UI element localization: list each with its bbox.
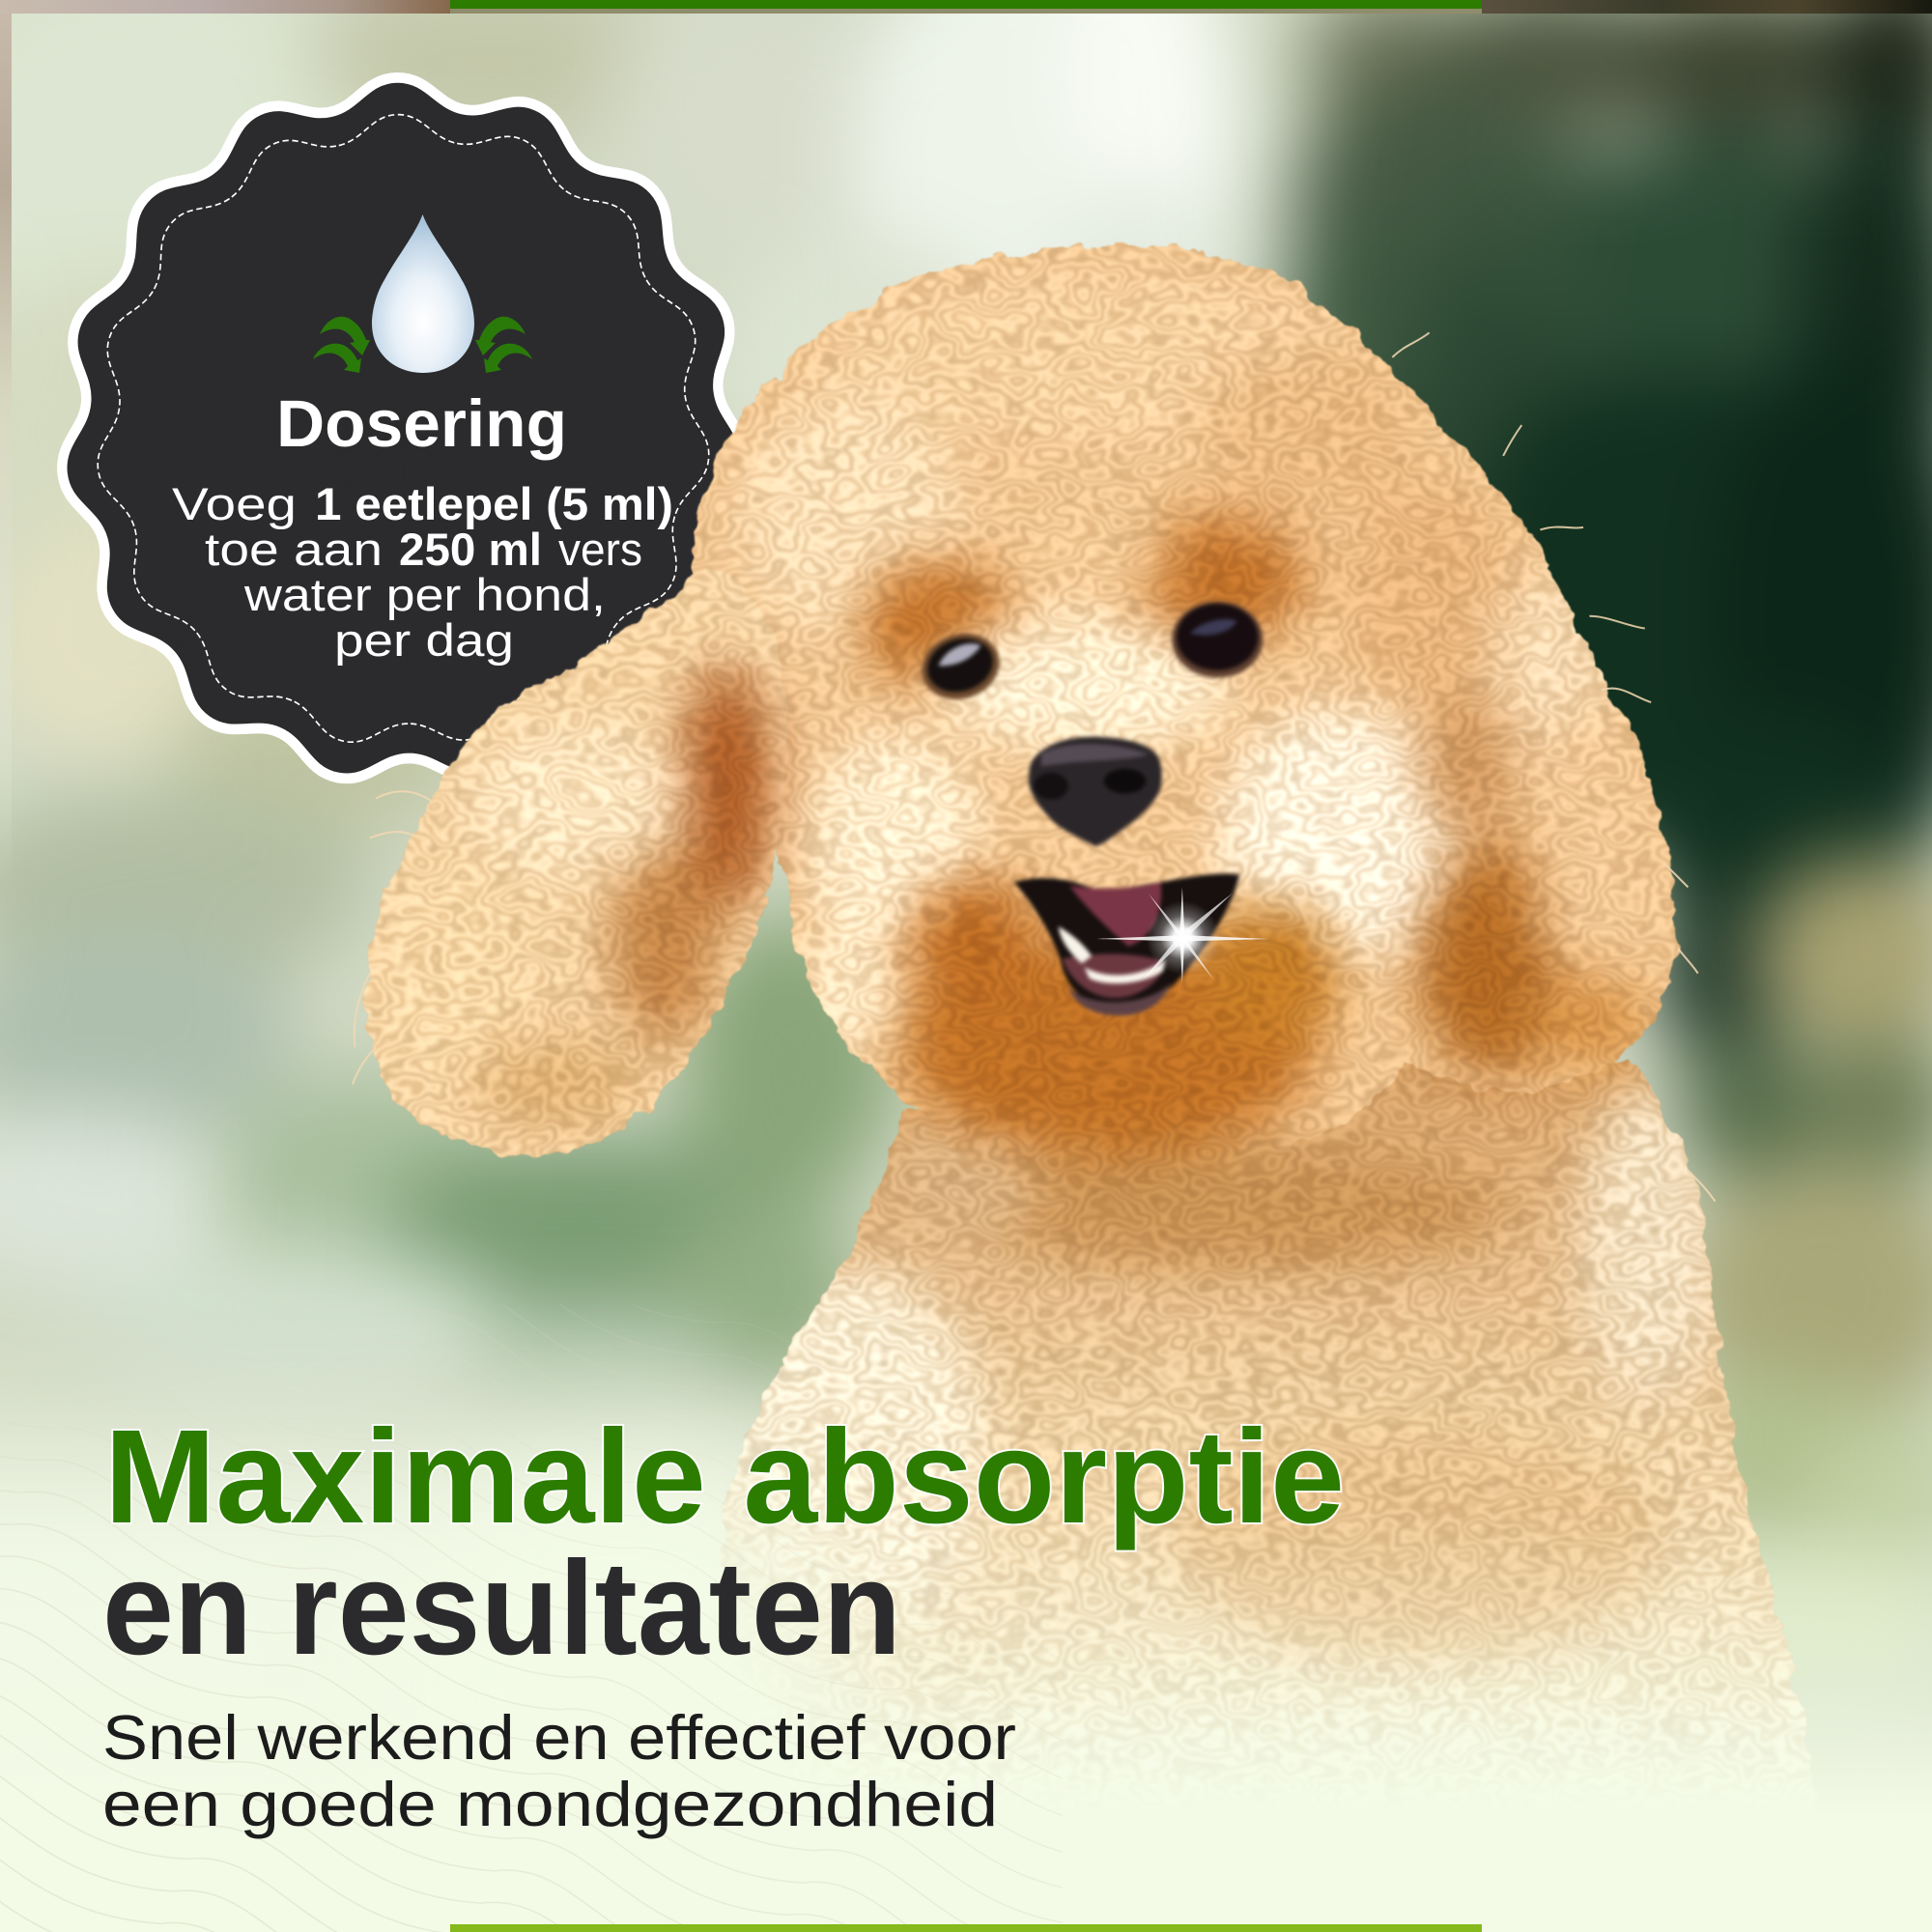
badge text block: 1 eetlepel (5 ml) xyxy=(315,478,673,529)
stray hairs xyxy=(353,332,1716,1202)
badge heading: Dosering xyxy=(276,386,567,461)
badge: Dosering xyxy=(55,77,752,791)
badge text block: per dag xyxy=(334,614,514,666)
subtitle: een goede mondgezondheid xyxy=(102,1769,998,1839)
subtitle xyxy=(102,1702,1016,1839)
wave line pattern xyxy=(0,1304,1063,1932)
pale wash over lower left of the dog xyxy=(386,1468,850,1932)
bottom pale panel xyxy=(0,1814,1932,1932)
left eye xyxy=(913,624,1008,709)
icon: water drop xyxy=(372,214,474,373)
badge text block: water per hond, xyxy=(243,569,606,620)
badge dashed stitching xyxy=(86,109,720,758)
badge text block: Voeg xyxy=(172,478,297,529)
dog photo illustration xyxy=(352,242,1810,1776)
badge white outline xyxy=(55,77,752,791)
frame strip: top centre xyxy=(450,9,1482,14)
bottom green bar xyxy=(450,1924,1482,1932)
frame strip: top right xyxy=(1482,0,1932,14)
frame strip: left xyxy=(0,14,12,883)
badge text block: toe aan xyxy=(205,524,383,575)
badge dark fill xyxy=(55,77,752,791)
frame strip: top left xyxy=(0,0,450,14)
right eye xyxy=(1172,601,1263,678)
subtitle: Snel werkend en effectief voor xyxy=(102,1702,1016,1773)
title: line 2: en resultaten xyxy=(102,1534,901,1683)
badge text block: vers xyxy=(558,524,642,575)
top green bar xyxy=(450,0,1482,9)
title: line 1: Maximale absorptie xyxy=(104,1403,1345,1551)
tooth sparkle xyxy=(1096,887,1269,983)
icon: green arrows left xyxy=(313,317,370,373)
mouth xyxy=(1014,873,1239,1015)
badge text block: 250 ml xyxy=(399,524,542,575)
icon: green arrows right xyxy=(475,317,532,373)
bottom fade to pale green xyxy=(0,1507,1932,1816)
dog fur body, head and ears xyxy=(362,242,1810,1776)
badge text block xyxy=(172,478,673,666)
nose xyxy=(1029,737,1162,846)
